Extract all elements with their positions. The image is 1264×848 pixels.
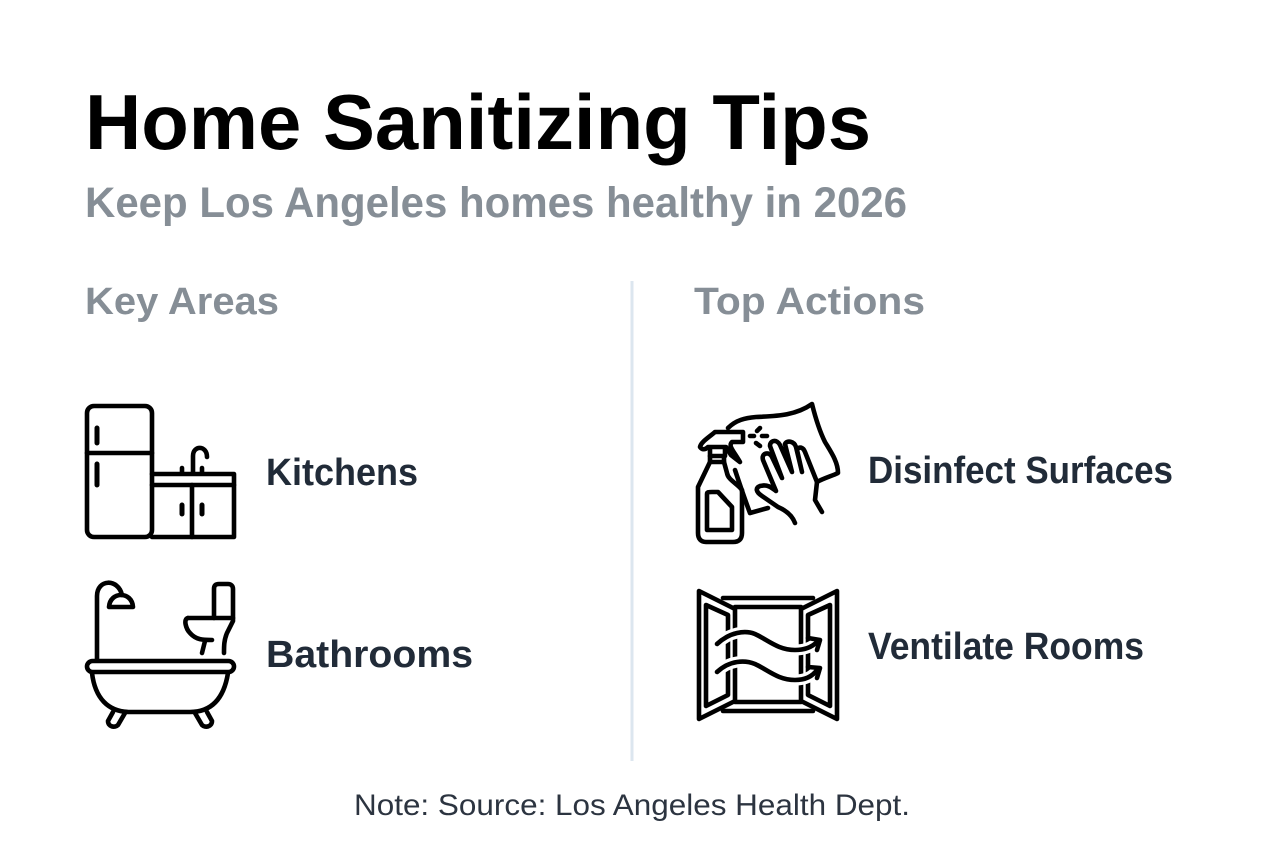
icon: kitchen: [87, 406, 234, 537]
source note: Note: Source: Los Angeles Health Dept.: [354, 789, 910, 822]
label: disinfect surfaces: Disinfect Surfaces: [868, 450, 1173, 492]
icon: open window with airflow: [699, 591, 837, 719]
label: kitchens: Kitchens: [266, 452, 418, 494]
label: ventilate rooms: Ventilate Rooms: [868, 626, 1144, 668]
label: bathrooms: Bathrooms: [266, 634, 473, 676]
icon: spray bottle and cloth: [698, 404, 838, 542]
icon: bathroom: [87, 583, 234, 727]
subtitle: Keep Los Angeles homes healthy in 2026: [85, 179, 907, 227]
title: Home Sanitizing Tips: [85, 78, 871, 166]
heading: top actions: Top Actions: [694, 281, 925, 323]
heading: key areas: Key Areas: [85, 281, 279, 323]
